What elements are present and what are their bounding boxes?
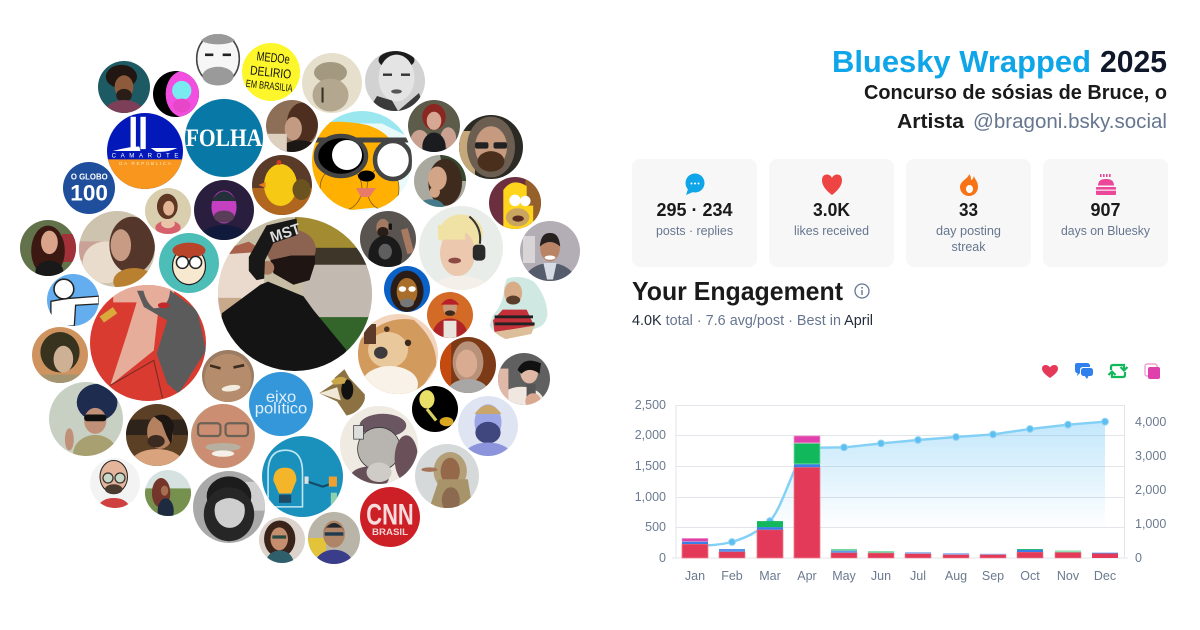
handle: @bragoni.bsky.social <box>973 111 1167 133</box>
icon: speech bubble <box>686 174 704 195</box>
avatar: Homer Simpson <box>489 177 541 229</box>
icon: likes <box>1042 365 1058 378</box>
subtitle: Artista: Artista <box>897 111 965 133</box>
avatar: shiba with headset <box>318 368 366 416</box>
panel: posts and replies <box>632 159 757 267</box>
month labels: May <box>832 569 857 583</box>
label: posts · replies <box>656 223 733 238</box>
avatar: Eixo Político logo <box>249 372 313 436</box>
avatar: man with glasses in purple shirt <box>308 512 360 578</box>
left axis labels: 1,000 <box>635 490 666 504</box>
area under cumulative line <box>695 422 1105 558</box>
icon: cake <box>1096 174 1116 195</box>
month labels: Sep <box>982 569 1004 583</box>
avatar: woman with blonde braids <box>415 444 479 513</box>
avatar: black and white woman with headdress <box>193 471 265 543</box>
heading: Your Engagement: Your Engagement <box>632 276 843 306</box>
left axis labels <box>635 398 666 565</box>
left axis labels: 500 <box>645 520 666 534</box>
avatar: Camarote da República logo <box>107 113 183 190</box>
icon: quotes <box>1145 364 1160 379</box>
avatar: woman resting on hand <box>414 155 466 207</box>
avatar: CNN Brasil logo: CNN <box>366 498 414 532</box>
avatar: red haired woman <box>408 100 460 152</box>
left axis labels: 2,000 <box>635 428 666 442</box>
icon: info <box>855 284 869 298</box>
avatar: bald cartoon sticker <box>90 458 140 508</box>
right axis labels <box>1135 415 1166 565</box>
right axis labels: 3,000 <box>1135 449 1166 463</box>
line markers <box>729 418 1108 545</box>
label: day posting <box>936 223 1001 238</box>
month labels: Dec <box>1094 569 1116 583</box>
avatar: pink pixel portrait <box>153 71 200 117</box>
avatar: toad drawing <box>302 53 362 113</box>
avatar: woman in blue turban <box>49 382 123 456</box>
panel: streak <box>906 159 1031 267</box>
avatar: blue sticker mascot <box>47 274 99 326</box>
avatar: Folha logo <box>185 99 263 177</box>
avatar: man taking phone selfie <box>498 353 550 415</box>
avatar: woman in red lipstick <box>20 220 76 276</box>
month labels: Jul <box>910 569 926 583</box>
title: 2025 <box>1100 44 1167 79</box>
avatar: sketched bearded head <box>196 34 240 86</box>
avatar: smiling blonde woman <box>440 337 496 407</box>
icon: reposts <box>1108 365 1128 377</box>
right axis labels: 4,000 <box>1135 415 1166 429</box>
avatar: man in suit <box>520 221 580 281</box>
avatar: blue bearded man illustration <box>458 396 518 470</box>
month labels: Apr <box>797 569 817 583</box>
right axis labels: 0 <box>1135 551 1142 565</box>
avatar: yellow chick toy <box>252 155 312 218</box>
engagement summary: 4.0K total · 7.6 avg/post · Best in April <box>632 313 873 329</box>
value: 3.0K <box>813 199 851 220</box>
avatar: woman in landscape <box>145 470 191 516</box>
avatar: woman with curly hair and glasses <box>259 517 305 576</box>
avatar: man with bun <box>126 404 188 466</box>
right axis labels: 2,000 <box>1135 483 1166 497</box>
month labels: Jan <box>685 569 705 583</box>
avatar: black and white woman <box>365 51 425 111</box>
chart: engagement bars and cumulative line <box>635 398 1166 583</box>
month labels: Feb <box>721 569 743 583</box>
month labels: Oct <box>1020 569 1040 583</box>
avatar: afro illustration <box>98 61 150 113</box>
legend <box>1042 363 1160 379</box>
avatar: O Globo 100 logo <box>63 162 115 214</box>
left axis labels: 2,500 <box>635 398 666 412</box>
right axis labels: 1,000 <box>1135 517 1166 531</box>
avatar: blonde woman with headphones <box>419 206 503 290</box>
month labels <box>685 569 1116 583</box>
icon: flame <box>960 174 978 196</box>
avatar: man with red cap <box>427 292 473 338</box>
avatar: bird cage with light bulb <box>262 436 343 517</box>
month labels: Aug <box>945 569 967 583</box>
avatar: woman with bangs <box>32 327 88 389</box>
avatar: main profile photo <box>218 217 372 371</box>
value: 33 <box>959 199 978 220</box>
avatar: teal cartoon with glasses <box>159 233 219 293</box>
avatar: sticker man in Flamengo shirt <box>490 277 548 339</box>
subtitle: contest name: Concurso de sósias de Bruce, o <box>864 82 1167 104</box>
value: 295 · 234 <box>656 199 733 220</box>
month labels: Mar <box>759 569 781 583</box>
month labels: Nov <box>1057 569 1080 583</box>
avatar: old man with glasses <box>191 404 255 468</box>
cumulative line <box>695 422 1105 546</box>
left axis labels: 1,500 <box>635 459 666 473</box>
panel: likes <box>769 159 894 267</box>
label: likes received <box>794 223 869 238</box>
avatar: long haired man with glasses <box>459 115 523 179</box>
panel: days on Bluesky <box>1043 159 1168 267</box>
avatar: woman with curly hair <box>266 100 318 152</box>
value: 907 <box>1090 199 1120 220</box>
avatar: blue ring cartoon <box>384 266 430 312</box>
avatar: Medo e Delirio logo <box>242 43 300 101</box>
avatar: smiling man close-up <box>202 350 254 403</box>
avatar: illustrated woman in red <box>90 285 206 401</box>
left axis labels: 0 <box>659 551 666 565</box>
avatar: monster illustration <box>340 406 418 490</box>
label: days on Bluesky <box>1061 223 1150 238</box>
title: Bluesky Wrapped <box>832 44 1091 79</box>
avatar: yellow skeleton <box>412 386 458 432</box>
icon: heart <box>822 174 842 195</box>
avatar: man in purple light <box>194 180 254 240</box>
icon: replies <box>1075 363 1093 379</box>
avatar: pinup woman <box>145 188 191 234</box>
avatar: woman with cat <box>79 211 155 295</box>
avatar: golden retriever <box>358 314 438 402</box>
label line 2: streak <box>952 239 986 254</box>
avatar cluster <box>20 31 580 578</box>
stacked bars <box>682 436 1118 558</box>
avatar: man taking mirror selfie <box>360 211 416 267</box>
avatar: Jake the dog with glasses <box>312 111 412 211</box>
month labels: Jun <box>871 569 891 583</box>
avatar: CNN Brasil logo <box>360 487 420 547</box>
